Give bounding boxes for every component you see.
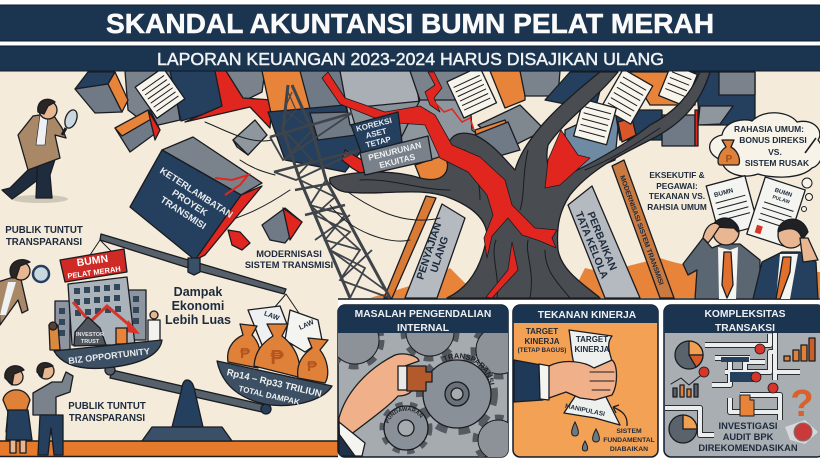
panel: Tekanan Kinerja (513, 305, 658, 457)
plank: orange left (384, 196, 436, 298)
transmission tower (270, 85, 390, 298)
question pins (699, 344, 778, 393)
plank: Penyajian Ulang: PENYAJIAN (414, 221, 444, 281)
red sparkle circle (785, 420, 818, 444)
right pan bowl: Rp14 – Rp33 TRILIUN (226, 367, 323, 400)
label: Koreksi Aset Tetap: KOREKSI (355, 116, 393, 134)
left pan bowl (54, 340, 162, 368)
panel: Masalah Pengendalian Internal (337, 304, 509, 458)
text: Investigasi: INVESTIGASI (719, 421, 777, 431)
label: Penurunan Ekuitas: EKUITAS (378, 151, 417, 170)
block: Keterlambatan Proyek Transmisi: KETERLAMBATAN (158, 166, 235, 221)
money bags: ₱ (240, 345, 250, 362)
text: Modernisasi Sistem Transmisi: MODERNISASI (256, 249, 322, 259)
text: Publik Tuntut Transparansi top (5, 225, 83, 248)
text: Eksekutif & Pegawai: TEKANAN VS. (649, 191, 705, 201)
text: Investigasi (698, 421, 798, 453)
pie chart top (675, 341, 703, 369)
gear: Transparansi (416, 353, 498, 435)
left pan bowl: BIZ OPPORTUNITY (68, 346, 150, 366)
hand placing puzzle piece (339, 354, 432, 456)
gear: Pundawaran: PUNDAWARAN (386, 406, 423, 424)
squeezed paper: KINERJA (574, 345, 610, 354)
text: Publik Tuntut Transparansi bottom: PUBLIK TUNTUT (68, 401, 146, 412)
thought bubble: SISTEM RUSAK (745, 158, 810, 168)
thought bubble: VS. (768, 147, 782, 157)
scale base (142, 427, 232, 441)
investor trust bag: TRUST (81, 339, 100, 345)
figure: executive left (683, 218, 760, 299)
header: TRANSAKSI (715, 323, 775, 334)
small figures on pan (49, 311, 160, 350)
header (338, 305, 508, 334)
sign: BUMN Pelat Merah: BUMN (76, 253, 109, 269)
big question mark: ? (790, 383, 814, 425)
scale upper arm (100, 234, 286, 294)
red cracks (225, 72, 590, 298)
plank: Penyajian Ulang (405, 204, 465, 298)
right pan bowl: TOTAL DAMPAK (238, 384, 301, 407)
text: Eksekutif & Pegawai: PEGAWAI: (656, 181, 698, 191)
money bags (228, 324, 328, 383)
papers in collage (135, 64, 697, 145)
figure: executive right (753, 219, 818, 299)
law papers: LAW (298, 319, 316, 332)
label: Penurunan Ekuitas: PENURUNAN (367, 140, 422, 163)
background gears (338, 333, 508, 457)
plank: Perbaikan Tata Kelola: TATA KELOLA (573, 210, 611, 281)
document: BUMN Pulaw: PULAW (771, 194, 791, 206)
icon: money bag: P (726, 154, 733, 165)
squeezed paper: TARGET (576, 335, 608, 344)
figures: couple looking up (3, 363, 73, 455)
text: Sistem Fundamental Diabaikan: FUNDAMENTAL (603, 437, 655, 444)
gear: Pundawaran (380, 402, 432, 454)
label: Koreksi Aset Tetap (351, 112, 402, 155)
header: TEKANAN KINERJA (538, 310, 637, 321)
decline arrow (73, 302, 135, 330)
block: Keterlambatan Proyek Transmisi: TRANSMISI (158, 194, 208, 232)
water drops (572, 422, 599, 451)
document: BUMN Pulaw (747, 177, 805, 247)
law papers (248, 306, 322, 352)
panel: Kompleksitas Transaksi (664, 305, 820, 457)
balance scale (90, 234, 305, 441)
text: Publik Tuntut Transparansi top: TRANSPARANSI (6, 237, 82, 248)
figure: woman with magnifier (0, 260, 49, 325)
thought bubble: BONUS DIREKSI (739, 135, 807, 145)
text: Modernisasi Sistem Transmisi (245, 249, 333, 270)
subtitle banner (0, 46, 820, 71)
text: Sistem Fundamental Diabaikan: SISTEM (616, 428, 642, 435)
subtitle banner: LAPORAN KEUANGAN 2023-2024 HARUS DISAJIKAN ULANG (157, 49, 664, 69)
plank: Perbaikan Tata Kelola (568, 186, 640, 298)
text: Publik Tuntut Transparansi bottom: TRANSPARANSI (69, 413, 145, 424)
text: Modernisasi Sistem Transmisi: SISTEM TRANSMISI (245, 260, 333, 270)
label: Koreksi Aset Tetap: TETAP (365, 135, 392, 150)
text: Dampak Ekonomi Lebih Luas: Ekonomi (172, 299, 224, 313)
maze (665, 333, 800, 435)
block: Keterlambatan Proyek Transmisi (130, 137, 262, 260)
document: BUMN Pulaw: BUMN (774, 188, 793, 199)
text: Target Kinerja (Tetap Bagus) (518, 327, 566, 354)
text: Investigasi: DIREKOMENDASIKAN (698, 443, 798, 453)
tree (330, 72, 710, 298)
panel 1 artwork (338, 333, 508, 457)
squeezed paper: MANIPULASI (564, 403, 606, 418)
law papers: LAW (263, 310, 280, 322)
text: Sistem Fundamental Diabaikan (603, 428, 655, 453)
text: Dampak Ekonomi Lebih Luas (165, 285, 231, 327)
header (664, 305, 820, 334)
sign: BUMN Pelat Merah (60, 249, 127, 282)
bubble circles (802, 178, 812, 212)
bar chart top right (784, 338, 815, 361)
pie chart bottom (669, 415, 697, 443)
text: Target Kinerja (Tetap Bagus): (TETAP BAGUS) (518, 347, 566, 354)
figure: detective with magnifier (2, 99, 79, 203)
scale lower arm (110, 370, 265, 412)
plank: Modernisasi Sistem Transmisi: MODERNISASI SISTEM TRANSMISI (618, 175, 664, 286)
label: Koreksi Aset Tetap: ASET (365, 127, 388, 140)
line and bar chart left (671, 376, 700, 397)
header: INTERNAL (397, 323, 449, 334)
text: Eksekutif & Pegawai: RAHSIA UMUM (647, 202, 707, 212)
text: Target Kinerja (Tetap Bagus): KINERJA (524, 337, 560, 346)
thought bubble (710, 113, 820, 177)
text: Target Kinerja (Tetap Bagus): TARGET (526, 327, 558, 336)
left pan: building (55, 277, 146, 350)
fist and sleeve (514, 360, 616, 402)
sign: BUMN Pelat Merah: PELAT MERAH (67, 264, 121, 281)
header: MASALAH PENGENDALIAN (355, 309, 491, 320)
investor trust bag: INVESTOR (76, 332, 104, 338)
text: Publik Tuntut Transparansi bottom (68, 401, 146, 424)
investor trust bag (74, 317, 106, 346)
text: Eksekutif & Pegawai (647, 170, 707, 212)
plank: Penyajian Ulang: ULANG (428, 235, 451, 274)
text: Eksekutif & Pegawai: EKSEKUTIF & (649, 170, 705, 180)
arrow to paper (613, 405, 627, 426)
right pan bowl (217, 361, 332, 407)
text: Sistem Fundamental Diabaikan: DIABAIKAN (610, 446, 648, 453)
document: BUMN: BUMN (713, 187, 734, 199)
money bags: ₱ (307, 358, 317, 375)
text: Publik Tuntut Transparansi top: PUBLIK TUNTUT (5, 225, 83, 236)
text: Investigasi: AUDIT BPK (723, 432, 774, 442)
header: KOMPLEKSITAS (704, 309, 786, 320)
text: Dampak Ekonomi Lebih Luas: Dampak (174, 285, 222, 299)
header (513, 305, 658, 323)
gear: Transparansi: TRANSPARANSI (442, 353, 494, 385)
main title banner (0, 5, 820, 41)
power cables (205, 122, 440, 241)
thought bubble: RAHASIA UMUM: (734, 124, 804, 134)
block: Keterlambatan Proyek Transmisi: PROYEK (170, 188, 209, 219)
icon: golf club (805, 138, 816, 153)
main title banner: SKANDAL AKUNTANSI BUMN PELAT MERAH (106, 8, 714, 39)
text: Dampak Ekonomi Lebih Luas: Lebih Luas (165, 313, 231, 327)
plank: Perbaikan Tata Kelola: PERBAIKAN (584, 210, 619, 272)
document: BUMN (706, 176, 758, 236)
scale fulcrum (172, 380, 203, 427)
red decline arrow (431, 98, 474, 130)
money bags: ₱ (270, 347, 284, 369)
plank: Modernisasi Sistem Transmisi (612, 160, 674, 298)
falling blocks collage (75, 71, 755, 250)
label: Penurunan Ekuitas (360, 136, 432, 175)
squeezed paper (564, 330, 620, 425)
